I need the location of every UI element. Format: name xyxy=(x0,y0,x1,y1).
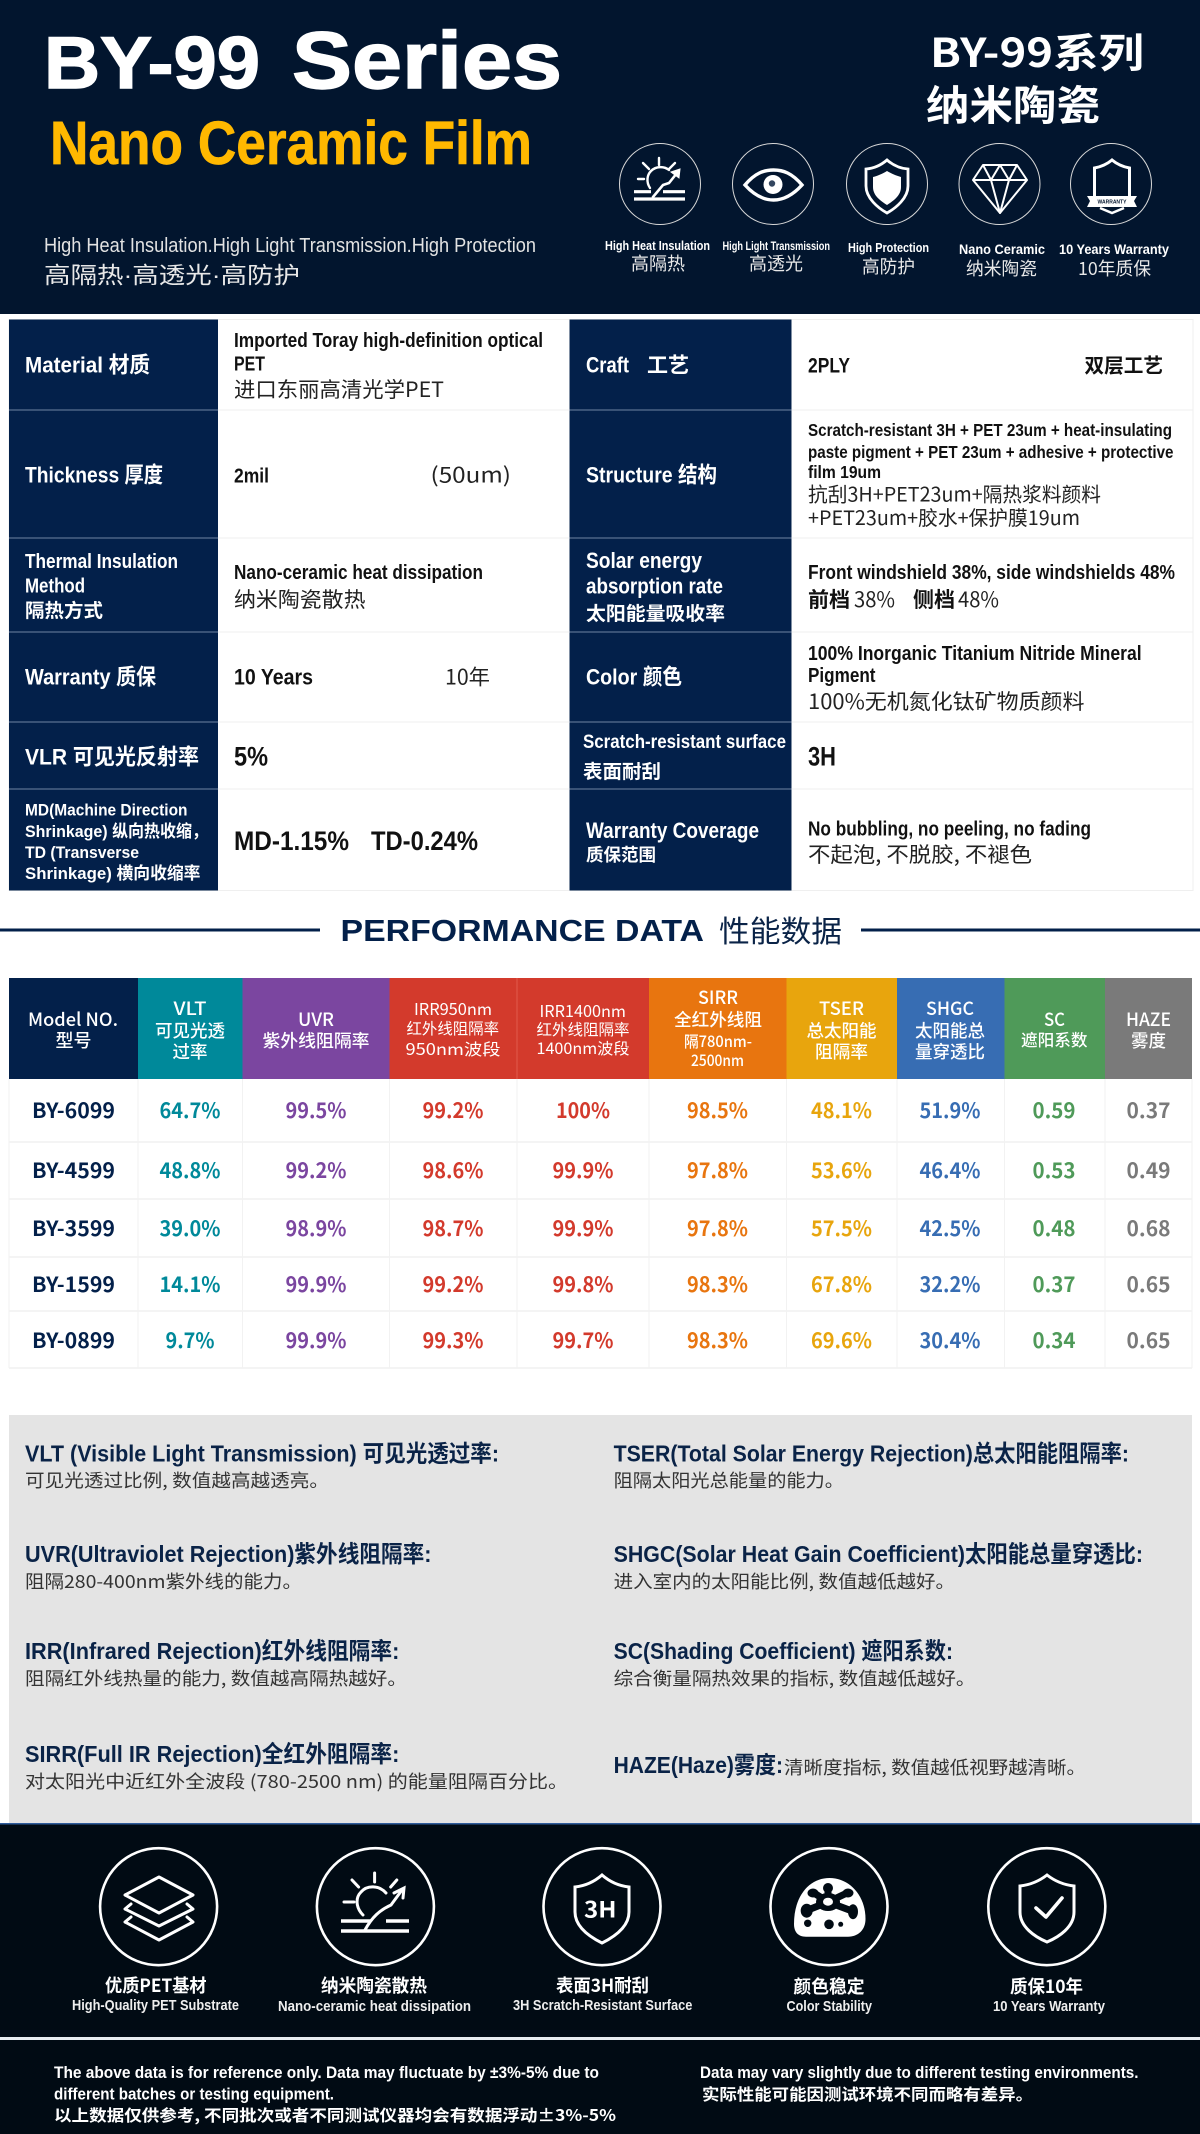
icon: warranty shield check xyxy=(988,1848,1105,1965)
icon: diamond xyxy=(959,144,1040,224)
icon: nano ceramic heat dissipation xyxy=(317,1848,434,1965)
heading: nano ceramic Chinese: 纳米陶瓷 xyxy=(926,72,1100,132)
disclaimer right xyxy=(700,2063,1138,2105)
row: solar energy absorption rate: 前档 xyxy=(808,584,850,614)
title: BY-99 Series xyxy=(44,16,562,106)
row: warranty: 10 Years xyxy=(234,665,313,690)
icon: eye xyxy=(732,144,814,224)
feature label: PET substrate: High-Quality PET Substrate xyxy=(72,1997,239,2014)
icon label: high protection: 高防护 xyxy=(862,253,915,279)
glossary: IRR: IRR(Infrared Rejection)红外线阻隔率: xyxy=(25,1638,399,1664)
feature label: PET substrate xyxy=(72,1972,239,2014)
header cell: model number: Model NO. xyxy=(28,1006,118,1032)
glossary: IRR xyxy=(25,1638,407,1691)
icon: shield xyxy=(846,144,928,224)
data row: BY-0899: 0.65 xyxy=(1126,1325,1170,1355)
header cell: HAZE: 雾度 xyxy=(1131,1028,1166,1053)
icon label: high heat insulation: 高隔热 xyxy=(631,250,685,276)
feature label: color stability: 颜色稳定 xyxy=(793,1973,865,1999)
row: warranty coverage: Warranty Coverage xyxy=(586,818,759,843)
row: craft: 2PLY xyxy=(808,355,850,378)
row: material: Material 材质 xyxy=(25,353,150,378)
header cell: VLT xyxy=(138,978,242,1079)
data row: BY-6099: 98.5% xyxy=(687,1095,748,1125)
row: warranty coverage: No bubbling, no peeling, no fading xyxy=(808,818,1091,840)
icon: layers xyxy=(100,1848,217,1965)
disclaimer left xyxy=(54,2063,616,2126)
subtitle: Nano Ceramic Film: Nano Ceramic Film xyxy=(50,109,532,177)
title: BY-99 Series: BY-99 xyxy=(44,23,260,104)
row: material: Imported Toray high-definition optical xyxy=(234,330,543,352)
data row: BY-0899: BY-0899 xyxy=(32,1325,115,1355)
row: VLR: 5% xyxy=(234,742,268,772)
row: structure: +PET23um+胶水+保护膜19um xyxy=(808,502,1080,531)
data row: BY-6099: 64.7% xyxy=(160,1095,220,1125)
row: warranty xyxy=(25,662,490,692)
row: warranty: Warranty 质保 xyxy=(25,665,156,690)
data row: BY-1599: 0.65 xyxy=(1126,1269,1170,1299)
icon: warranty badge xyxy=(1070,144,1152,224)
data row: BY-1599: 67.8% xyxy=(811,1269,872,1299)
header cell: SIRR: 2500nm xyxy=(691,1049,744,1071)
feature label: 3H scratch-resistant: 表面3H耐刮 xyxy=(556,1972,649,1998)
feature label: nano-ceramic heat dissipation: Nano-ceramic heat dissipation xyxy=(278,1998,471,2015)
row: structure xyxy=(586,420,1174,531)
row: thermal insulation method: Thermal Insulation xyxy=(25,551,178,573)
data row: BY-0899: 99.3% xyxy=(422,1325,484,1355)
glossary: UVR: UVR(Ultraviolet Rejection)紫外线阻隔率: xyxy=(25,1541,432,1567)
icon: color stability xyxy=(770,1848,888,1965)
disclaimer right: Data may vary slightly due to different testing environments. xyxy=(700,2063,1138,2082)
feature label: PET substrate: 优质PET基材 xyxy=(105,1972,207,1998)
disclaimer left: different batches or testing equipment. xyxy=(54,2084,334,2104)
row: craft: 双层工艺 xyxy=(1084,350,1163,379)
data row: BY-6099: 99.5% xyxy=(286,1095,346,1125)
table grid xyxy=(9,1079,1192,1368)
row: warranty coverage xyxy=(586,818,1091,869)
row: color: Color 颜色 xyxy=(586,665,682,690)
row: thermal insulation method: Method xyxy=(25,576,85,598)
glossary: TSER: TSER(Total Solar Energy Rejection)总太阳能阻隔率: xyxy=(614,1441,1129,1467)
row: solar energy absorption rate: 太阳能量吸收率 xyxy=(586,599,725,626)
data row: BY-6099 xyxy=(32,1095,1170,1125)
feature label: 10 years warranty: 质保10年 xyxy=(1010,1973,1083,1999)
row: shrinkage xyxy=(25,801,478,883)
row: color xyxy=(586,643,1142,716)
header cell: IRR1400nm: IRR1400nm xyxy=(540,998,626,1022)
glossary: UVR xyxy=(25,1541,432,1594)
data row: BY-3599: 57.5% xyxy=(811,1213,872,1243)
data row: BY-1599: 14.1% xyxy=(160,1269,220,1299)
glossary: SIRR xyxy=(25,1741,568,1794)
row: solar energy absorption rate: absorption rate xyxy=(586,574,723,599)
data row: BY-1599: 99.2% xyxy=(422,1269,484,1299)
row: structure: Structure 结构 xyxy=(586,463,717,488)
feature label: color stability: Color Stability xyxy=(786,1998,873,2015)
tagline Chinese: 高隔热·高透光·高防护 xyxy=(44,262,300,288)
header cell: SIRR: 隔780nm- xyxy=(684,1030,752,1052)
row: shrinkage: TD-0.24% xyxy=(371,826,478,856)
data row: BY-3599: 98.7% xyxy=(422,1213,484,1243)
row: craft xyxy=(586,350,1163,379)
row: craft: Craft xyxy=(586,353,630,378)
header cell: IRR1400nm: 1400nm波段 xyxy=(536,1037,630,1059)
data row: BY-4599: 99.2% xyxy=(286,1155,346,1185)
row: solar energy absorption rate: 38% xyxy=(854,584,895,614)
heading: performance data xyxy=(0,907,1200,951)
glossary: SIRR: 对太阳光中近红外全波段 (780-2500 nm) 的能量阻隔百分比。 xyxy=(25,1768,568,1794)
data row: BY-1599: BY-1599 xyxy=(32,1269,115,1299)
feature label: 3H scratch-resistant xyxy=(513,1972,692,2014)
icon label: 10 years warranty: 10年质保 xyxy=(1078,255,1151,281)
row: shrinkage: MD-1.15% xyxy=(234,826,349,856)
data row: BY-6099: 99.2% xyxy=(422,1095,484,1125)
feature label: 3H scratch-resistant: 3H Scratch-Resistant Surface xyxy=(513,1997,692,2014)
data row: BY-0899: 98.3% xyxy=(687,1325,748,1355)
row: scratch-resistant surface xyxy=(583,732,836,784)
row: material xyxy=(25,330,543,404)
glossary: VLT: VLT (Visible Light Transmission) 可见光透过率: xyxy=(25,1441,499,1467)
row: thickness: (50um) xyxy=(430,460,511,490)
glossary: SHGC: 进入室内的太阳能比例, 数值越低越好。 xyxy=(614,1568,955,1594)
data row: BY-0899: 99.9% xyxy=(286,1325,346,1355)
glossary: SHGC xyxy=(614,1541,1143,1594)
data row: BY-4599 xyxy=(32,1155,1170,1185)
row: color: Pigment xyxy=(808,665,876,687)
header cell: TSER: 总太阳能 xyxy=(806,1018,876,1043)
data row: BY-4599: 98.6% xyxy=(422,1155,484,1185)
data row: BY-1599: 98.3% xyxy=(687,1269,748,1299)
header cell: IRR950nm: IRR950nm xyxy=(414,996,492,1020)
data row: BY-6099: BY-6099 xyxy=(32,1095,115,1125)
row: solar energy absorption rate: 48% xyxy=(958,584,999,614)
glossary: TSER xyxy=(614,1441,1129,1493)
data row: BY-6099: 0.37 xyxy=(1126,1095,1170,1125)
glossary: HAZE: 清晰度指标, 数值越低视野越清晰。 xyxy=(784,1754,1086,1780)
data row: BY-3599: 97.8% xyxy=(687,1213,748,1243)
header cell: HAZE xyxy=(1105,978,1192,1079)
data row: BY-3599: 42.5% xyxy=(920,1213,980,1243)
heading: performance data: 性能数据 xyxy=(719,907,842,951)
data row: BY-6099: 0.59 xyxy=(1032,1095,1076,1125)
disclaimer left: 以上数据仅供参考, 不同批次或者不同测试仪器均会有数据浮动±3%-5% xyxy=(54,2102,616,2126)
data row: BY-0899: 99.7% xyxy=(552,1325,614,1355)
header cell: IRR950nm: 红外线阻隔率 xyxy=(406,1017,499,1039)
row: color: 100% Inorganic Titanium Nitride Mineral xyxy=(808,643,1142,665)
row: scratch-resistant surface: Scratch-resistant surface xyxy=(583,732,786,753)
data row: BY-4599: 0.49 xyxy=(1126,1155,1170,1185)
row: shrinkage: Shrinkage) 横向收缩率 xyxy=(25,863,200,883)
header cell: HAZE: HAZE xyxy=(1126,1006,1171,1032)
glossary: VLT: 可见光透过比例, 数值越高越透亮。 xyxy=(25,1467,329,1493)
icon: 3H shield xyxy=(544,1848,660,1965)
data row: BY-3599 xyxy=(32,1213,1170,1243)
header cell: model number xyxy=(9,978,138,1079)
header cell: VLT: 过率 xyxy=(172,1039,208,1064)
row: warranty coverage: 不起泡, 不脱胶, 不褪色 xyxy=(808,839,1032,869)
row: solar energy absorption rate: 侧档 xyxy=(913,584,955,614)
data row: BY-4599: 97.8% xyxy=(687,1155,748,1185)
icon label: high heat insulation: High Heat Insulation xyxy=(605,239,710,253)
header cell: IRR1400nm xyxy=(516,978,649,1079)
icon label: high light transmission: High Light Transmission xyxy=(722,239,830,253)
header cell: SHGC: SHGC xyxy=(926,995,974,1021)
row: scratch-resistant surface: 3H xyxy=(808,742,836,772)
panel: header banner xyxy=(0,0,1200,314)
data row: BY-4599: 99.9% xyxy=(552,1155,614,1185)
data row: BY-3599: 39.0% xyxy=(160,1213,220,1243)
header cell: IRR950nm: 950nm波段 xyxy=(406,1036,500,1060)
row: shrinkage: TD (Transverse xyxy=(25,843,139,862)
data row: BY-0899: 69.6% xyxy=(811,1325,872,1355)
row: craft: 工艺 xyxy=(647,355,689,378)
performance data table xyxy=(9,978,1192,1368)
panel: glossary xyxy=(9,1415,1192,1823)
glossary: UVR: 阻隔280-400nm紫外线的能力。 xyxy=(25,1568,302,1594)
header cell: TSER: TSER xyxy=(819,995,864,1021)
icon: warranty badge: WARRANTY xyxy=(1098,200,1127,206)
glossary: HAZE: HAZE(Haze)雾度: xyxy=(614,1752,783,1778)
header cell: TSER xyxy=(786,978,897,1079)
feature label: nano-ceramic heat dissipation: 纳米陶瓷散热 xyxy=(321,1972,427,1998)
glossary: IRR: 阻隔红外线热量的能力, 数值越高隔热越好。 xyxy=(25,1665,407,1691)
icon label: high protection xyxy=(848,241,929,279)
header cell: SIRR xyxy=(649,978,786,1079)
icon label: 10 years warranty: 10 Years Warranty xyxy=(1059,242,1169,257)
data row: BY-4599: 48.8% xyxy=(160,1155,220,1185)
icon: high heat insulation xyxy=(620,144,700,224)
data row: BY-0899: 0.34 xyxy=(1032,1325,1076,1355)
icon label: nano ceramic: Nano Ceramic xyxy=(959,242,1045,257)
data row: BY-6099: 48.1% xyxy=(811,1095,872,1125)
header cell: SIRR: SIRR xyxy=(698,984,738,1010)
header cell: IRR950nm xyxy=(390,978,517,1079)
data row: BY-1599: 99.9% xyxy=(286,1269,346,1299)
row: thermal insulation method: 纳米陶瓷散热 xyxy=(234,584,366,614)
data row: BY-3599: 0.48 xyxy=(1032,1213,1076,1243)
row: thermal insulation method: 隔热方式 xyxy=(25,596,103,623)
row: solar energy absorption rate xyxy=(586,548,1175,626)
data row: BY-4599: 0.53 xyxy=(1032,1155,1076,1185)
glossary: SC xyxy=(614,1638,976,1691)
header cell: SHGC: 量穿透比 xyxy=(915,1039,985,1064)
icon label: high light transmission xyxy=(722,239,830,276)
glossary: SHGC: SHGC(Solar Heat Gain Coefficient)太阳能总量穿透比: xyxy=(614,1541,1143,1567)
row: color: 100%无机氮化钛矿物质颜料 xyxy=(808,686,1084,716)
glossary: SC: SC(Shading Coefficient) 遮阳系数: xyxy=(614,1638,953,1664)
header cell: model number: 型号 xyxy=(56,1027,92,1053)
glossary: VLT xyxy=(25,1441,499,1493)
row: shrinkage: MD(Machine Direction xyxy=(25,801,188,820)
data row: BY-6099: 100% xyxy=(556,1095,610,1125)
row: VLR xyxy=(25,742,268,772)
header cell: VLT: 可见光透 xyxy=(155,1018,225,1043)
row: solar energy absorption rate: Solar energy xyxy=(586,548,703,573)
data row: BY-4599: 46.4% xyxy=(920,1155,980,1185)
row: VLR: VLR 可见光反射率 xyxy=(25,744,199,770)
feature label: nano-ceramic heat dissipation xyxy=(278,1972,471,2015)
data row: BY-6099: 51.9% xyxy=(920,1095,980,1125)
row: structure: 抗刮3H+PET23um+隔热浆料颜料 xyxy=(808,478,1101,508)
row: thermal insulation method xyxy=(25,551,483,623)
row: thickness: Thickness 厚度 xyxy=(25,463,163,488)
row: warranty: 10年 xyxy=(445,662,490,692)
icon: 3H shield: 3H xyxy=(584,1892,616,1924)
feature label: color stability xyxy=(786,1973,873,2015)
glossary: SIRR: SIRR(Full IR Rejection)全红外阻隔率: xyxy=(25,1741,399,1767)
data row: BY-3599: BY-3599 xyxy=(32,1213,115,1243)
icon label: 10 years warranty xyxy=(1059,242,1169,281)
row: thermal insulation method: Nano-ceramic heat dissipation xyxy=(234,562,483,584)
data row: BY-1599: 0.37 xyxy=(1032,1269,1076,1299)
header cell: SIRR: 全红外线阻 xyxy=(674,1007,762,1032)
row: thickness: 2mil xyxy=(234,466,269,488)
icon label: nano ceramic xyxy=(959,242,1045,281)
tagline English: High Heat Insulation.High Light Transmission.High Protection xyxy=(44,235,536,257)
data row: BY-3599: 99.9% xyxy=(552,1213,614,1243)
header cell: SC: 遮阳系数 xyxy=(1021,1027,1088,1051)
heading: performance data: PERFORMANCE DATA xyxy=(340,913,704,948)
header cell: VLT: VLT xyxy=(172,995,206,1021)
header cell: UVR: 紫外线阻隔率 xyxy=(262,1028,370,1053)
data row: BY-3599: 0.68 xyxy=(1126,1213,1170,1243)
header cell: SHGC: 太阳能总 xyxy=(915,1018,985,1043)
header cell: SC: SC xyxy=(1044,1006,1065,1032)
row: warranty coverage: 质保范围 xyxy=(586,842,656,867)
row: structure: film 19um xyxy=(808,462,881,482)
feature label: 10 years warranty: 10 Years Warranty xyxy=(993,1998,1106,2015)
header cell: SC xyxy=(1004,978,1105,1079)
data row: BY-4599: BY-4599 xyxy=(32,1155,115,1185)
data row: BY-0899: 30.4% xyxy=(920,1325,980,1355)
title: BY-99 Series: Series xyxy=(292,16,562,106)
disclaimer right: 实际性能可能因测试环境不同而略有差异。 xyxy=(702,2081,1033,2105)
glossary: SC: 综合衡量隔热效果的指标, 数值越低越好。 xyxy=(614,1665,976,1691)
header cell: SHGC xyxy=(897,978,1004,1079)
icon label: high light transmission: 高透光 xyxy=(749,250,803,276)
header cell: UVR: UVR xyxy=(298,1006,334,1032)
header cell: UVR xyxy=(242,978,390,1079)
data row: BY-1599: 32.2% xyxy=(920,1269,980,1299)
data row: BY-1599 xyxy=(32,1269,1170,1299)
icon label: nano ceramic: 纳米陶瓷 xyxy=(966,255,1037,281)
glossary: HAZE xyxy=(614,1752,1086,1780)
feature label: 10 years warranty xyxy=(993,1973,1106,2015)
data row: BY-3599: 98.9% xyxy=(286,1213,346,1243)
panel: specification table xyxy=(9,320,1193,890)
header cell: IRR1400nm: 红外线阻隔率 xyxy=(536,1018,630,1040)
heading: BY-99 series Chinese: BY-99系列 xyxy=(930,21,1144,79)
panel: feature footer xyxy=(0,1823,1200,2134)
row: shrinkage: Shrinkage) 纵向热收缩， xyxy=(25,821,208,841)
data row: BY-1599: 99.8% xyxy=(552,1269,614,1299)
row: thickness xyxy=(25,460,511,490)
header cell: TSER: 阻隔率 xyxy=(815,1039,868,1064)
icon label: high heat insulation xyxy=(605,239,710,276)
icon label: high protection: High Protection xyxy=(848,241,929,255)
data row: BY-4599: 53.6% xyxy=(811,1155,872,1185)
row: scratch-resistant surface: 表面耐刮 xyxy=(583,757,661,784)
row: material: PET xyxy=(234,354,265,376)
data row: BY-0899 xyxy=(32,1325,1170,1355)
data row: BY-0899: 9.7% xyxy=(166,1325,214,1355)
glossary: TSER: 阻隔太阳光总能量的能力。 xyxy=(614,1467,844,1493)
row: material: 进口东丽高清光学PET xyxy=(234,374,444,404)
disclaimer left: The above data is for reference only. Data may fluctuate by ±3%-5% due to xyxy=(54,2063,599,2082)
